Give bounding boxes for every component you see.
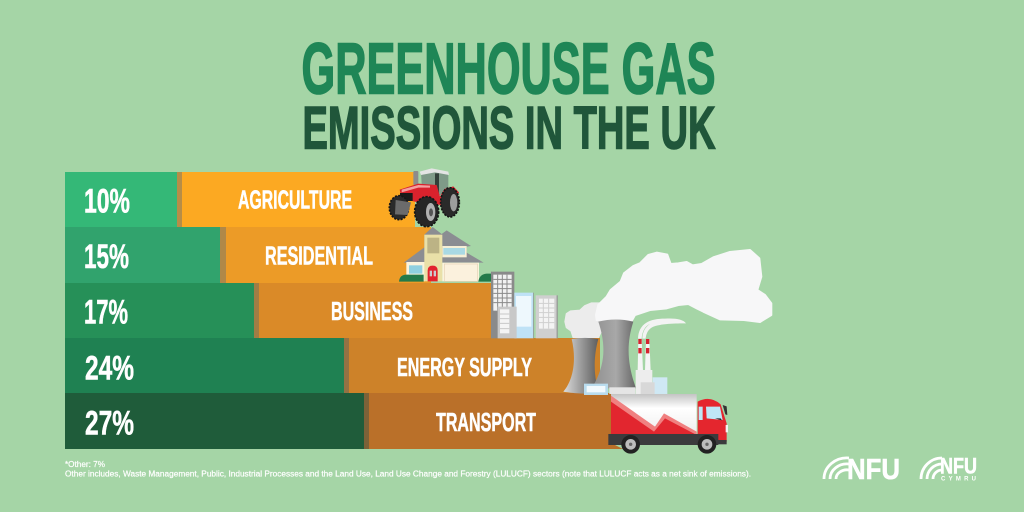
row: residential <box>65 227 431 283</box>
row: transport <box>65 393 623 449</box>
value 15%: 15% <box>84 238 129 276</box>
title line 2: EMISSIONS IN THE UK <box>302 94 716 162</box>
garage <box>442 263 479 281</box>
tower <box>424 235 442 281</box>
smoke cloud large <box>596 250 771 322</box>
row: energy supply <box>65 338 600 393</box>
logo wordmark: NFU <box>847 454 900 486</box>
door <box>428 266 438 281</box>
footnote line 2: Other includes, Waste Management, Public, Industrial Processes and the Land Use, Land Use Change and Forestry (LULUCF) sectors (note that LULUCF acts as a net sink of emissions). <box>65 470 751 478</box>
cargo box <box>611 394 697 435</box>
logo wordmark: NFU <box>940 454 977 478</box>
logo: NFU Cymru <box>921 454 977 482</box>
left wing <box>406 262 425 281</box>
icon: tractor <box>389 168 459 227</box>
mirror <box>723 405 727 415</box>
front small block <box>498 307 517 338</box>
value 17%: 17% <box>84 294 128 332</box>
stacked bars <box>65 172 623 449</box>
title <box>302 30 716 162</box>
tall grey tower <box>491 272 514 338</box>
label business: BUSINESS <box>331 296 413 326</box>
upper floor <box>442 246 467 257</box>
value 24%: 24% <box>85 350 134 388</box>
blue tower <box>514 293 534 338</box>
front wheel <box>698 435 716 454</box>
cooling tower right <box>592 319 636 388</box>
label transport: TRANSPORT <box>436 407 536 437</box>
logo arcs <box>824 458 849 479</box>
red graphic <box>611 396 697 435</box>
left window <box>409 265 422 274</box>
bumper light <box>726 425 728 432</box>
rear wheel <box>621 435 640 454</box>
icon: truck <box>608 394 728 454</box>
roofs <box>404 227 484 263</box>
row: agriculture <box>65 172 415 227</box>
hedges <box>399 275 424 282</box>
label residential: RESIDENTIAL <box>265 240 373 270</box>
logo subtitle: CYMRU <box>941 476 976 482</box>
steam trails <box>638 318 686 339</box>
plant buildings <box>584 370 667 395</box>
icon: office buildings <box>491 272 558 338</box>
title line 1: GREENHOUSE GAS <box>302 30 716 110</box>
smoke plumes <box>565 250 771 339</box>
cab <box>698 399 727 442</box>
logo: NFU <box>824 454 900 486</box>
footnote <box>65 460 751 478</box>
smoke cloud small <box>565 303 607 339</box>
icon: house <box>399 227 491 282</box>
chimneys <box>638 339 651 371</box>
label agriculture: AGRICULTURE <box>238 185 352 215</box>
cooling tower left <box>563 338 599 394</box>
value 10%: 10% <box>84 182 130 220</box>
chassis <box>608 434 718 445</box>
logo arcs <box>921 458 942 479</box>
light grey tower <box>536 295 558 338</box>
value 27%: 27% <box>85 404 134 442</box>
footnote line 1: *Other: 7% <box>65 460 105 469</box>
row: business <box>65 283 491 338</box>
label energy supply: ENERGY SUPPLY <box>397 352 532 382</box>
icon: power station <box>563 318 686 395</box>
